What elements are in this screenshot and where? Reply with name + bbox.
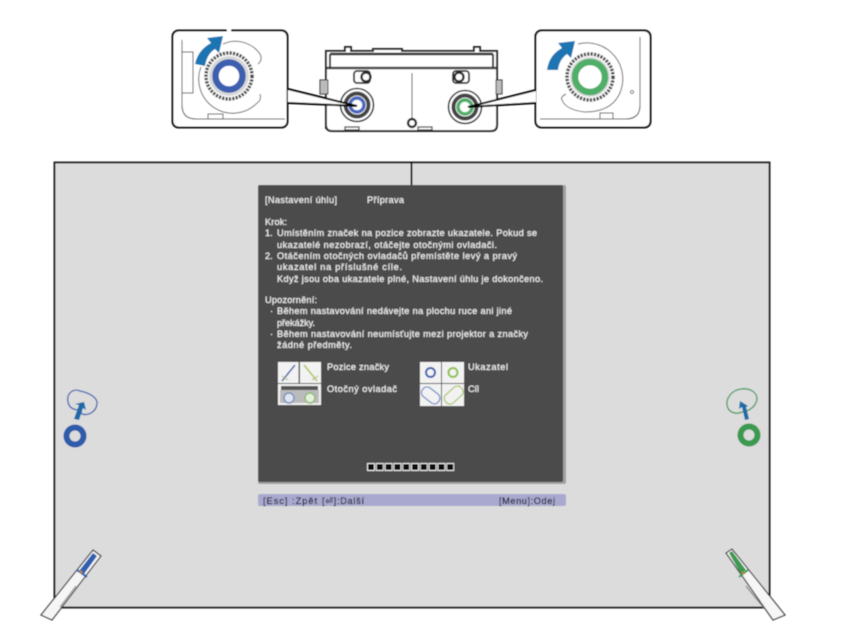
text: steps: 1. bbox=[265, 228, 273, 238]
text: steps: Krok: bbox=[265, 217, 287, 227]
icon: targets bbox=[419, 384, 465, 406]
text: steps: Umístěním značek na pozice zobrazte ukazatele. Pokud se bbox=[277, 228, 537, 238]
pointer: left callout leader bbox=[288, 89, 357, 106]
footer bar: key hints: [Menu]:Odej bbox=[499, 496, 555, 506]
heading: dialog title bbox=[265, 195, 405, 205]
label: pointer: Ukazatel bbox=[468, 362, 508, 372]
icon: marker positions bbox=[278, 362, 321, 383]
heading: dialog title: [Nastavení úhlu] bbox=[265, 195, 337, 205]
icon: pointers bbox=[420, 362, 464, 383]
footer bar: key hints bbox=[258, 494, 566, 506]
icon: right green pointer and target bbox=[727, 389, 758, 444]
panel: on-screen dialog bbox=[258, 185, 566, 484]
panel: projector rear view bbox=[320, 47, 502, 131]
text: steps: ukazatelé nezobrazí, otáčejte otočnými ovladači. bbox=[277, 240, 497, 250]
text: warnings: Během nastavování neumísťujte mezi projektor a značky bbox=[277, 329, 528, 339]
panel: projection screen bbox=[54, 162, 770, 608]
text: steps: Když jsou oba ukazatele plné, Nastavení úhlu je dokončeno. bbox=[277, 274, 543, 284]
footer bar: key hints: [Esc] :Zpět bbox=[263, 496, 317, 506]
callout: right dial close-up bbox=[536, 30, 650, 128]
text: warnings: Během nastavování nedávejte na plochu ruce ani jiné bbox=[277, 306, 512, 316]
text: warnings: · bbox=[270, 306, 273, 316]
footer bar: key hints: [⏎]:Další bbox=[322, 496, 364, 506]
text: warnings: žádné předměty. bbox=[277, 340, 352, 350]
label: target: Cíl bbox=[468, 384, 479, 394]
text: steps: 2. bbox=[265, 251, 273, 261]
arrow: right rotation direction bbox=[547, 41, 575, 70]
pointer: right callout leader bbox=[468, 90, 536, 107]
heading: dialog title: Příprava bbox=[367, 195, 405, 205]
text: steps: ukazatel na příslušné cíle. bbox=[277, 262, 402, 272]
text: steps: Otáčením otočných ovladačů přemístěte levý a pravý bbox=[277, 251, 517, 261]
icon: left blue marker pen bbox=[41, 550, 101, 620]
left lens dial bbox=[340, 88, 374, 122]
arrow: left rotation direction bbox=[195, 36, 223, 66]
callout: left dial close-up bbox=[172, 30, 288, 128]
right lens dial bbox=[448, 90, 482, 124]
icon: rotary dials bbox=[278, 384, 321, 405]
icon: right green marker pen bbox=[726, 549, 785, 620]
label: rotary dials: Otočný ovladač bbox=[327, 384, 397, 394]
label: marker positions: Pozice značky bbox=[327, 362, 389, 372]
text: warnings: překážky. bbox=[277, 318, 315, 328]
icon: left blue pointer and target bbox=[66, 390, 97, 444]
progress indicator bbox=[368, 464, 454, 470]
text: steps bbox=[265, 217, 543, 284]
text: warnings: Upozornění: bbox=[265, 295, 317, 305]
text: warnings bbox=[265, 295, 528, 350]
text: warnings: · bbox=[270, 329, 273, 339]
